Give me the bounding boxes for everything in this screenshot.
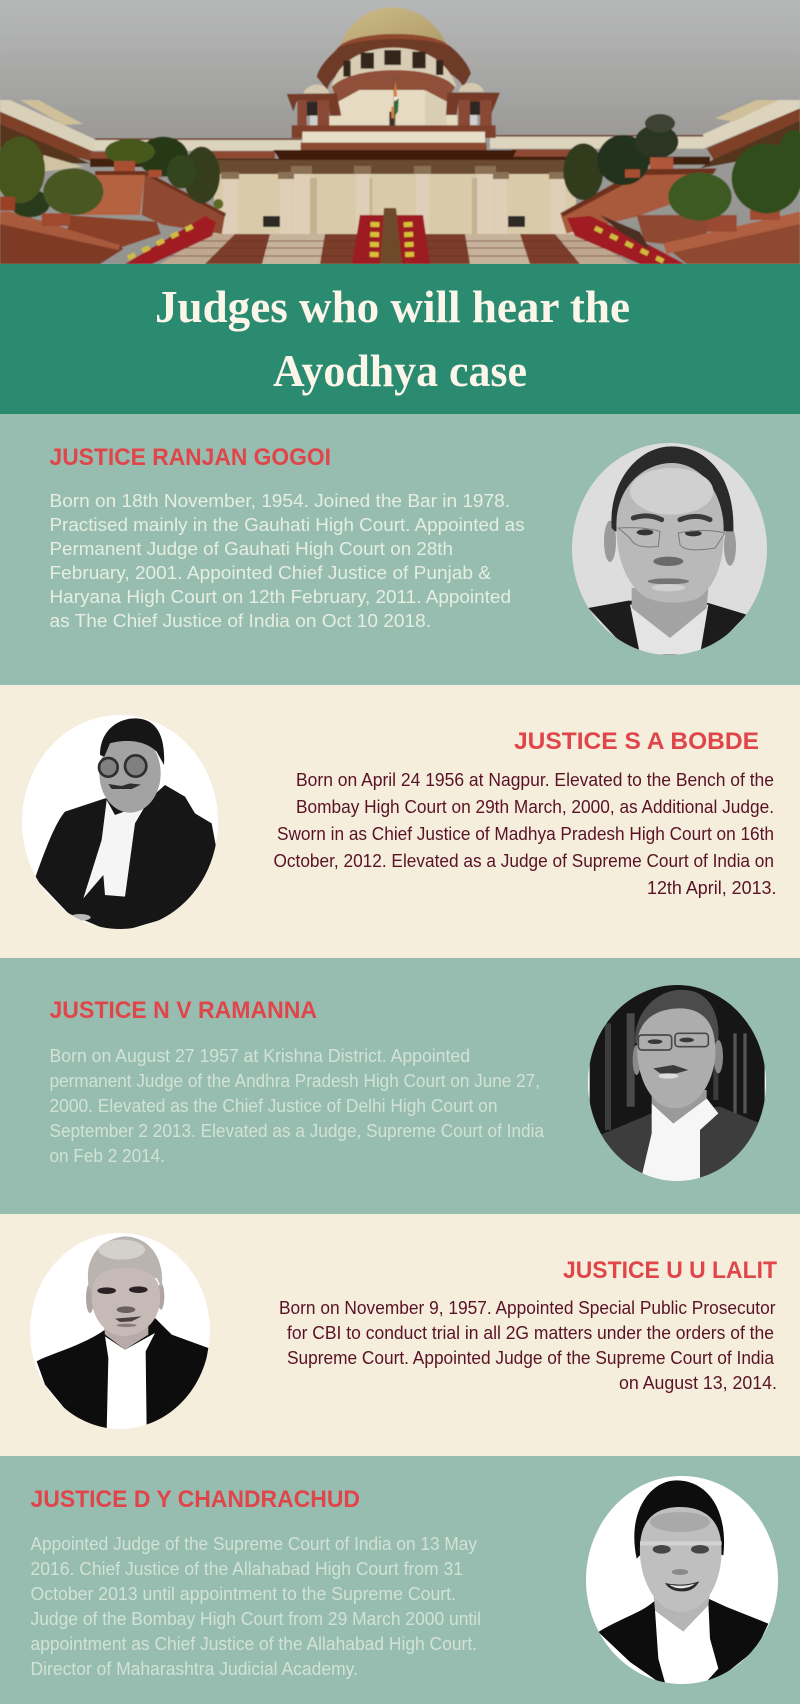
biography: for CBI to conduct trial in all 2G matters under the orders of the bbox=[287, 1323, 774, 1343]
title banner bbox=[0, 264, 800, 414]
biography: Haryana High Court on 12th February, 2011. Appointed bbox=[50, 587, 511, 607]
panel: Justice U U Lalit bbox=[0, 1214, 800, 1456]
biography: as The Chief Justice of India on Oct 10 2018. bbox=[50, 611, 431, 631]
biography: on August 13, 2014. bbox=[619, 1373, 777, 1393]
biography: February, 2001. Appointed Chief Justice of Punjab & bbox=[50, 563, 491, 583]
flowers bbox=[125, 208, 685, 264]
biography: Director of Maharashtra Judicial Academy. bbox=[30, 1659, 358, 1679]
biography: 2016. Chief Justice of the Allahabad High Court from 31 bbox=[30, 1559, 463, 1579]
biography: October, 2012. Elevated as a Judge of Supreme Court of India on bbox=[274, 851, 774, 871]
portrait: S A Bobde bbox=[22, 715, 218, 929]
panel: Justice Ranjan Gogoi bbox=[50, 443, 767, 655]
flag bbox=[389, 77, 399, 129]
left planters and plants bbox=[0, 137, 226, 264]
panel: Justice N V Ramanna bbox=[50, 985, 766, 1181]
biography: appointment as Chief Justice of the Allahabad High Court. bbox=[30, 1634, 477, 1654]
biography: Supreme Court. Appointed Judge of the Supreme Court of India bbox=[287, 1348, 775, 1368]
biography: Appointed Judge of the Supreme Court of India on 13 May bbox=[30, 1534, 477, 1554]
heading: JUSTICE U U LALIT bbox=[563, 1257, 777, 1284]
biography: 2000. Elevated as the Chief Justice of Delhi High Court on bbox=[50, 1096, 498, 1116]
dome and drum bbox=[273, 7, 517, 161]
steps bbox=[205, 234, 580, 264]
biography: permanent Judge of the Andhra Pradesh High Court on June 27, bbox=[50, 1071, 540, 1091]
side turrets bbox=[303, 85, 329, 93]
heading: JUSTICE RANJAN GOGOI bbox=[50, 444, 331, 471]
biography: Judge of the Bombay High Court from 29 March 2000 until bbox=[30, 1609, 481, 1629]
right planters and plants bbox=[560, 114, 800, 264]
title line two: Ayodhya case bbox=[273, 345, 527, 396]
heading: JUSTICE D Y CHANDRACHUD bbox=[30, 1486, 360, 1513]
porch wall and columns bbox=[214, 172, 576, 234]
biography bbox=[50, 1046, 545, 1166]
panel: Justice D Y Chandrachud bbox=[30, 1476, 778, 1684]
biography: 12th April, 2013. bbox=[647, 878, 776, 898]
biography: Bombay High Court on 29th March, 2000, as Additional Judge. bbox=[296, 797, 774, 817]
biography: Born on April 24 1956 at Nagpur. Elevated to the Bench of the bbox=[296, 770, 774, 790]
title line one: Judges who will hear the bbox=[155, 281, 630, 332]
biography bbox=[279, 1298, 777, 1393]
biography: Permanent Judge of Gauhati High Court on 28th bbox=[50, 539, 453, 559]
panel: Justice S A Bobde bbox=[0, 685, 800, 958]
biography: Born on August 27 1957 at Krishna District. Appointed bbox=[50, 1046, 470, 1066]
biography: September 2 2013. Elevated as a Judge, Supreme Court of India bbox=[50, 1121, 545, 1141]
portrait: D Y Chandrachud bbox=[586, 1476, 778, 1684]
biography bbox=[30, 1534, 481, 1679]
header photo: Supreme Court building bbox=[0, 0, 800, 264]
heading: JUSTICE N V RAMANNA bbox=[50, 997, 317, 1024]
portrait: U U Lalit bbox=[30, 1233, 210, 1429]
biography: Born on November 9, 1957. Appointed Special Public Prosecutor bbox=[279, 1298, 776, 1318]
portrait: Ranjan Gogoi bbox=[572, 443, 767, 655]
portrait: N V Ramanna bbox=[588, 985, 766, 1181]
biography bbox=[50, 491, 524, 631]
biography: Practised mainly in the Gauhati High Court. Appointed as bbox=[50, 515, 524, 535]
biography: Born on 18th November, 1954. Joined the Bar in 1978. bbox=[50, 491, 510, 511]
central bands bbox=[292, 125, 496, 138]
biography: on Feb 2 2014. bbox=[50, 1146, 165, 1166]
heading: JUSTICE S A BOBDE bbox=[514, 728, 759, 755]
biography: Sworn in as Chief Justice of Madhya Pradesh High Court on 16th bbox=[277, 824, 774, 844]
biography bbox=[274, 770, 776, 898]
biography: October 2013 until appointment to the Supreme Court. bbox=[30, 1584, 456, 1604]
